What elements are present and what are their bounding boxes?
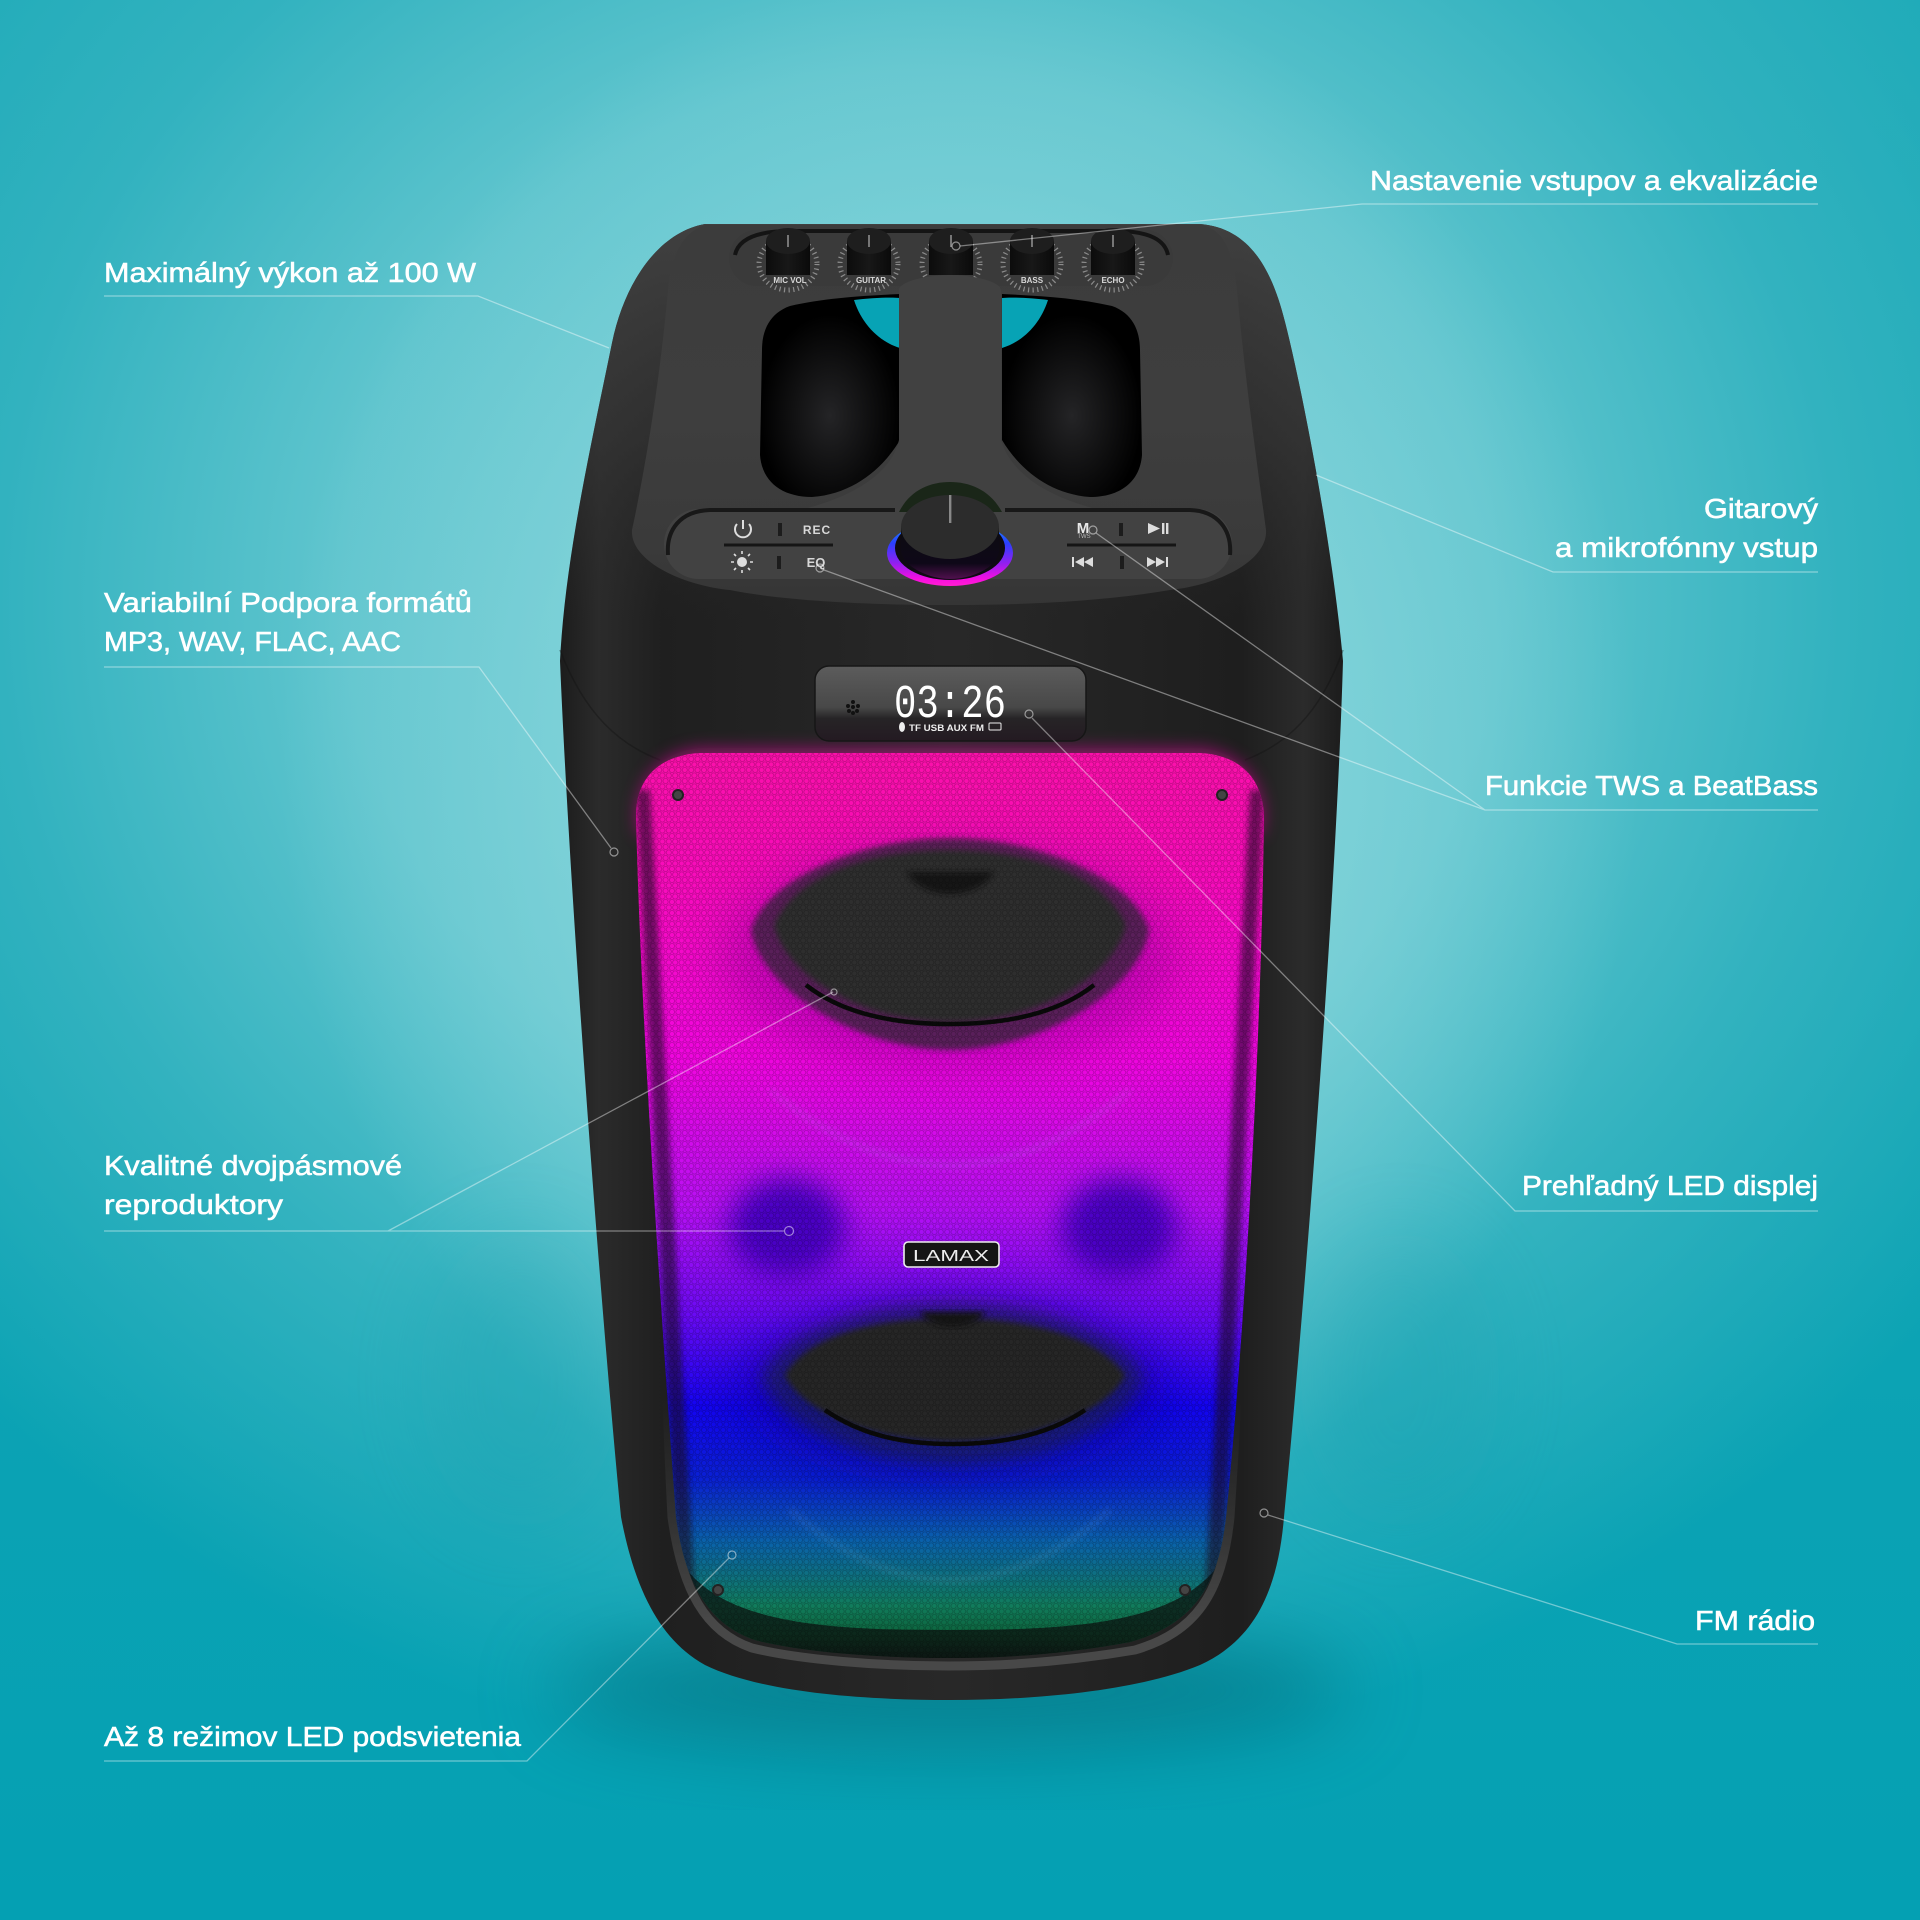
icon: play pause bbox=[1148, 523, 1168, 534]
knob: center bbox=[922, 228, 980, 290]
LED display bbox=[815, 666, 1086, 741]
floor shadow bbox=[420, 1230, 1500, 1750]
label: dual band speakers: Kvalitné dvojpásmové bbox=[104, 1150, 402, 1181]
bass ports bbox=[729, 1178, 1177, 1278]
leader line: output power bbox=[104, 296, 609, 348]
knob: mic vol: MIC VOL bbox=[773, 276, 807, 285]
knob: guitar: GUITAR bbox=[856, 276, 886, 285]
pink light spill bbox=[636, 748, 1264, 835]
label: FM radio: FM rádio bbox=[1695, 1605, 1815, 1636]
side vignette bbox=[636, 790, 1264, 1630]
status row: TF USB AUX FM bbox=[909, 723, 984, 734]
label: guitar input: Gitarový bbox=[1704, 493, 1818, 524]
bluetooth and battery marks bbox=[899, 722, 1001, 732]
icon: previous bbox=[1072, 557, 1093, 567]
knob: bass: BASS bbox=[1021, 276, 1044, 285]
label: M TWS: M bbox=[1077, 520, 1089, 537]
knob: guitar bbox=[840, 228, 898, 290]
label: LED display: Prehľadný LED displej bbox=[1522, 1170, 1818, 1201]
main volume knob bbox=[887, 482, 1013, 586]
divider bars bbox=[724, 544, 1176, 546]
leader line: inputs and EQ bbox=[952, 204, 1818, 250]
input control well bbox=[729, 228, 1173, 290]
led slots bbox=[779, 523, 1122, 569]
microphone dots bbox=[846, 700, 860, 715]
screws bbox=[673, 790, 1227, 1595]
leader line: LED modes bbox=[104, 1551, 736, 1761]
carrying handle bbox=[800, 275, 1100, 510]
handle openings bbox=[760, 294, 1142, 497]
top control surface bbox=[632, 225, 1266, 605]
speaker grille bbox=[630, 750, 1270, 1665]
faint woofer arcs bbox=[770, 1090, 1130, 1580]
shoulder shading bbox=[570, 224, 1330, 558]
speaker body bbox=[560, 224, 1343, 1700]
knob: echo: ECHO bbox=[1101, 276, 1125, 285]
icon: power bbox=[735, 520, 751, 537]
icon: next bbox=[1147, 557, 1168, 567]
leader lines: TWS and BeatBass bbox=[816, 526, 1818, 810]
knob: mic vol bbox=[759, 228, 817, 290]
speaker bbox=[555, 224, 1350, 1700]
label: formats: Variabilní Podpora formátů bbox=[104, 587, 472, 618]
label: EQ: EQ bbox=[807, 555, 825, 570]
label: dual band speakers: reproduktory bbox=[104, 1189, 283, 1220]
label: TWS and BeatBass: Funkcie TWS a BeatBass bbox=[1485, 770, 1818, 801]
time readout: 03:26 bbox=[894, 679, 1006, 732]
leader line: LED display bbox=[1025, 710, 1818, 1211]
label: REC: REC bbox=[803, 523, 831, 537]
leader lines: dual band speakers bbox=[104, 989, 837, 1236]
label: M TWS: TWS bbox=[1077, 534, 1091, 540]
LAMAX logo badge bbox=[904, 1242, 999, 1267]
mesh pattern bbox=[630, 750, 1270, 1662]
lower control panel bbox=[664, 509, 1232, 579]
label: inputs and EQ: Nastavenie vstupov a ekvalizácie bbox=[1370, 165, 1818, 196]
upper woofer bbox=[725, 838, 1175, 1065]
label: formats: MP3, WAV, FLAC, AAC bbox=[104, 626, 401, 657]
label: dual band speakers bbox=[104, 1150, 402, 1220]
icon: brightness bbox=[731, 551, 753, 573]
LAMAX logo badge: LAMAX bbox=[913, 1248, 989, 1265]
label: output power: Maximálný výkon až 100 W bbox=[104, 257, 477, 288]
label: guitar input bbox=[1555, 493, 1818, 563]
knob: echo bbox=[1084, 228, 1142, 290]
label: LED modes: Až 8 režimov LED podsvietenia bbox=[104, 1721, 521, 1752]
lower woofer bbox=[737, 1295, 1167, 1485]
leader line: formats bbox=[104, 667, 618, 856]
teal background seen through handle bbox=[854, 298, 900, 348]
leader line: guitar input bbox=[1316, 475, 1818, 572]
label: formats bbox=[104, 587, 472, 657]
bottom dark band bbox=[689, 1571, 1214, 1658]
label: guitar input: a mikrofónny vstup bbox=[1555, 532, 1818, 563]
leader line: FM radio bbox=[1260, 1509, 1818, 1644]
grey rim around grille bbox=[662, 1250, 1244, 1666]
knob: bass bbox=[1003, 228, 1061, 290]
shoulder seam bbox=[560, 650, 1343, 760]
